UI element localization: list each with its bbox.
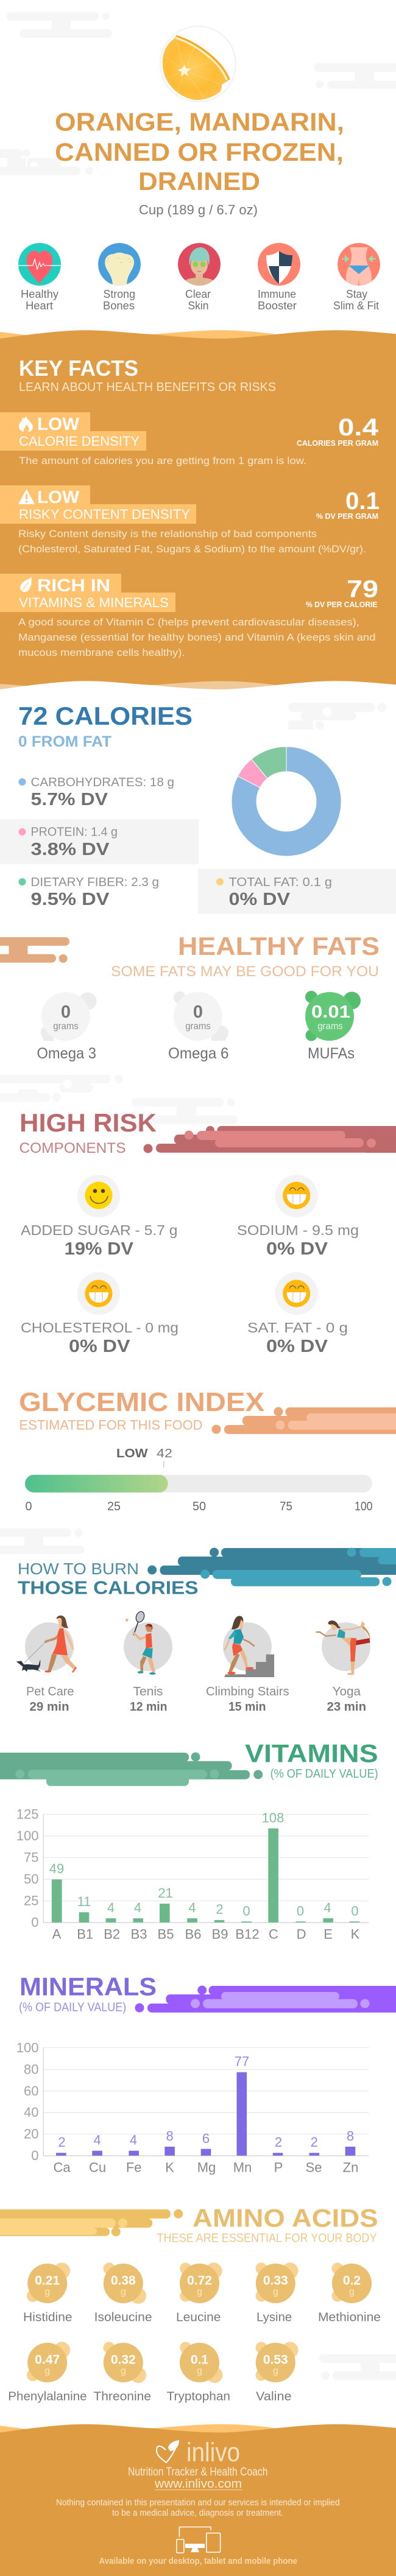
bar chart: minerals: Ca bbox=[54, 2160, 71, 2175]
activity: yoga: Yoga bbox=[333, 1685, 361, 1698]
icon: orange slice bbox=[160, 26, 236, 102]
subheading: ESTIMATED FOR THIS FOOD bbox=[19, 1418, 202, 1433]
benefit labels: Skin bbox=[188, 300, 208, 312]
item: added sugar bbox=[21, 1175, 178, 1259]
bar chart: vitamins: B2 bbox=[104, 1926, 120, 1941]
gauge label: 42 bbox=[157, 1446, 172, 1460]
serving size: Cup (189 g / 6.7 oz) bbox=[139, 202, 258, 217]
panel: minerals bbox=[16, 1972, 396, 2175]
decorative cloud bbox=[288, 703, 386, 730]
panel: key facts bbox=[0, 330, 396, 697]
activity: tennis bbox=[124, 1610, 172, 1714]
activity: yoga: 23 min bbox=[327, 1700, 366, 1714]
bar chart: vitamins: B12 bbox=[235, 1926, 260, 1941]
bar chart: vitamins: 75 bbox=[24, 1850, 39, 1865]
illustration: woman in yoga pose bbox=[316, 1621, 370, 1675]
metric name: RISKY CONTENT DENSITY bbox=[19, 507, 190, 522]
item: saturated fat: SAT. FAT - 0 g bbox=[247, 1320, 348, 1336]
bubble: lysine: g bbox=[273, 2287, 278, 2297]
bubble: histidine: Histidine bbox=[23, 2311, 72, 2324]
heading: calories: 72 CALORIES bbox=[18, 702, 193, 730]
wave: key facts bottom light bbox=[0, 681, 278, 694]
bubble: leucine: Leucine bbox=[176, 2311, 221, 2324]
activity: pet care: 29 min bbox=[29, 1700, 69, 1714]
bubble: phenylalanine: g bbox=[44, 2366, 50, 2376]
bubble: mufas: MUFAs bbox=[308, 1045, 355, 1062]
rating: LOW bbox=[37, 488, 80, 507]
benefit labels: Booster bbox=[258, 300, 297, 312]
bubble: histidine: 0.21 bbox=[35, 2274, 60, 2288]
gauge scale: 100 bbox=[355, 1500, 373, 1513]
bar chart: minerals: 4 bbox=[130, 2133, 137, 2148]
rating: LOW bbox=[37, 415, 80, 434]
fact: rich in vitamins and minerals bbox=[0, 574, 378, 658]
bar chart: minerals: K bbox=[165, 2160, 174, 2175]
description bbox=[18, 616, 375, 658]
row: protein: PROTEIN: 1.4 g bbox=[30, 826, 118, 839]
bubble: omega 3 bbox=[37, 992, 96, 1062]
decorative cloud bbox=[0, 1529, 85, 1554]
row: total fat: 0% DV bbox=[229, 890, 291, 909]
unit: CALORIES PER GRAM bbox=[297, 438, 378, 448]
gauge label: LOW bbox=[116, 1446, 148, 1460]
bar chart: vitamins: B9 bbox=[212, 1926, 228, 1941]
icon: immune booster bbox=[258, 243, 300, 286]
bubble: lysine: Lysine bbox=[256, 2311, 292, 2324]
bar chart: vitamins: B6 bbox=[185, 1926, 201, 1941]
decorative bars bbox=[0, 1753, 263, 1786]
gauge label bbox=[116, 1446, 172, 1468]
bubble: lysine: 0.33 bbox=[263, 2274, 288, 2288]
bubble: leucine: 0.72 bbox=[187, 2274, 212, 2288]
bar chart: vitamins: A bbox=[52, 1926, 62, 1941]
bubble: mufas: grams bbox=[317, 1021, 343, 1032]
decorative cloud: left of title bbox=[0, 149, 93, 175]
bubble: leucine: g bbox=[197, 2287, 202, 2297]
value: 0.4 bbox=[338, 414, 379, 441]
bubble: isoleucine: Isoleucine bbox=[94, 2311, 152, 2324]
icon: devices bbox=[177, 2527, 221, 2553]
heading: key facts: KEY FACTS bbox=[19, 356, 138, 381]
bar chart: minerals: 8 bbox=[166, 2128, 174, 2144]
bubble: mufas: 0.01 bbox=[311, 1002, 350, 1022]
decorative cloud bbox=[319, 2354, 396, 2380]
bubble: tryptophan: Tryptophan bbox=[167, 2390, 230, 2404]
bar chart: minerals: 8 bbox=[347, 2128, 354, 2144]
heading: healthy fats: HEALTHY FATS bbox=[178, 932, 380, 960]
illustration: woman climbing stairs bbox=[223, 1616, 274, 1677]
donut chart bbox=[232, 747, 341, 856]
bar chart: minerals: 2 bbox=[311, 2134, 318, 2150]
item: saturated fat: 0% DV bbox=[266, 1337, 328, 1356]
fact: calorie density bbox=[0, 412, 379, 466]
bar chart: vitamins: C bbox=[269, 1926, 278, 1941]
decorative bars bbox=[0, 2209, 183, 2236]
panel: high risk bbox=[19, 1108, 396, 1356]
fact: risky content density bbox=[0, 485, 380, 555]
icon: grin bbox=[283, 1280, 310, 1307]
disclaimer bbox=[56, 2497, 340, 2518]
benefit labels: Immune bbox=[258, 288, 296, 300]
icon: warning bbox=[18, 489, 35, 504]
bar chart: vitamins: 49 bbox=[49, 1861, 64, 1876]
subheading: COMPONENTS bbox=[19, 1140, 126, 1156]
bar chart: minerals: 20 bbox=[24, 2127, 39, 2142]
bubble: omega 6: grams bbox=[185, 1021, 211, 1032]
bubble: omega 6 bbox=[168, 991, 229, 1062]
bubble: isoleucine bbox=[94, 2263, 152, 2324]
bar chart: vitamins: 4 bbox=[107, 1900, 115, 1915]
icon: grin bbox=[283, 1181, 310, 1209]
bubble: omega 3: grams bbox=[53, 1021, 79, 1032]
gauge scale: 50 bbox=[193, 1500, 206, 1513]
item: sodium: SODIUM - 9.5 mg bbox=[237, 1222, 359, 1238]
decorative cloud: top right bbox=[314, 63, 396, 89]
disclaimer: Nothing contained in this presentation and our services is intended or implied bbox=[56, 2497, 340, 2508]
decorative bars bbox=[147, 1548, 396, 1586]
benefit labels: Heart bbox=[26, 300, 53, 312]
decorative bars bbox=[144, 1126, 396, 1153]
decorative cloud: top left bbox=[7, 12, 112, 38]
bar chart: minerals: 4 bbox=[93, 2133, 101, 2148]
row: carbohydrates bbox=[18, 776, 174, 809]
bar chart: minerals: 77 bbox=[235, 2053, 249, 2069]
decorative clouds: above high risk bbox=[0, 1075, 238, 1124]
activity: pet care bbox=[16, 1616, 77, 1714]
row: total fat: TOTAL FAT: 0.1 g bbox=[229, 876, 332, 889]
bar chart: vitamins: 0 bbox=[351, 1904, 359, 1919]
row: carbohydrates: CARBOHYDRATES: 18 g bbox=[30, 776, 174, 789]
heading: those calories: THOSE CALORIES bbox=[18, 1577, 199, 1599]
bar chart: minerals bbox=[16, 2040, 369, 2175]
panel: vitamins bbox=[0, 1739, 378, 1941]
activity: pet care: Pet Care bbox=[26, 1685, 74, 1698]
value: 79 bbox=[347, 576, 378, 603]
icon: clear skin bbox=[178, 243, 221, 287]
decorative bars bbox=[212, 1407, 396, 1434]
panel background bbox=[0, 330, 396, 694]
benefit labels bbox=[21, 288, 379, 312]
bar chart: minerals: 2 bbox=[58, 2134, 66, 2150]
bubble: threonine: 0.32 bbox=[111, 2353, 136, 2367]
icon: strong bones bbox=[98, 243, 141, 286]
activity: tennis: 12 min bbox=[130, 1700, 167, 1714]
footer background bbox=[0, 2424, 396, 2576]
description: A good source of Vitamin C (helps prevent cardiovascular diseases), bbox=[18, 616, 359, 628]
description bbox=[18, 528, 366, 555]
bubble: methionine: g bbox=[349, 2287, 355, 2297]
activity: climbing stairs: Climbing Stairs bbox=[206, 1685, 289, 1698]
bar chart: minerals: Zn bbox=[343, 2160, 358, 2175]
logo: wordmark: inlivo bbox=[186, 2438, 240, 2468]
bubble: omega 6: Omega 6 bbox=[168, 1045, 229, 1062]
heading: glycemic index: GLYCEMIC INDEX bbox=[19, 1387, 264, 1417]
bubble: threonine: Threonine bbox=[93, 2390, 151, 2404]
bubble: threonine bbox=[93, 2342, 151, 2404]
bar chart: vitamins: 0 bbox=[242, 1904, 250, 1919]
item: saturated fat bbox=[247, 1272, 348, 1356]
benefit icons row bbox=[18, 243, 380, 287]
icon: healthy heart bbox=[18, 243, 61, 286]
bar chart: minerals: 80 bbox=[24, 2061, 39, 2077]
bar chart: minerals: Mg bbox=[197, 2160, 216, 2175]
subheading: 0 FROM FAT bbox=[18, 733, 111, 750]
bar chart: vitamins: 4 bbox=[134, 1900, 141, 1915]
bar chart: minerals: 2 bbox=[275, 2134, 282, 2150]
activity: yoga bbox=[316, 1621, 370, 1714]
bar chart: vitamins: 25 bbox=[24, 1893, 39, 1909]
icon: smiley bbox=[85, 1181, 112, 1209]
benefit labels: Bones bbox=[103, 300, 135, 312]
item: sodium: 0% DV bbox=[266, 1239, 328, 1259]
subheading: LEARN ABOUT HEALTH BENEFITS OR RISKS bbox=[19, 381, 276, 394]
bubble: omega 3: 0 bbox=[61, 1002, 71, 1022]
availability note: Available on your desktop, tablet and mobile phone bbox=[99, 2556, 297, 2566]
subheading: SOME FATS MAY BE GOOD FOR YOU bbox=[111, 963, 379, 980]
icon: leaf bbox=[20, 577, 32, 592]
bar chart: vitamins bbox=[16, 1807, 369, 1941]
bar chart: minerals: Mn bbox=[233, 2160, 252, 2175]
bubble: histidine bbox=[23, 2263, 72, 2324]
title: CANNED OR FROZEN, bbox=[55, 138, 344, 166]
wave: footer light bbox=[0, 2424, 278, 2441]
bar chart: minerals: Cu bbox=[89, 2160, 106, 2175]
icon: flame bbox=[19, 415, 33, 432]
item: cholesterol bbox=[21, 1272, 179, 1356]
disclaimer: to be a medical advice, diagnosis or treatment. bbox=[112, 2508, 283, 2518]
bubble: valine: Valine bbox=[256, 2390, 291, 2404]
rating: RICH IN bbox=[37, 576, 110, 596]
gauge scale bbox=[26, 1500, 373, 1513]
bubble: histidine: g bbox=[44, 2287, 50, 2297]
item: added sugar: 19% DV bbox=[65, 1239, 134, 1259]
bubble: tryptophan bbox=[167, 2342, 230, 2404]
unit: % DV PER CALORIE bbox=[306, 600, 378, 609]
row: carbohydrates: 5.7% DV bbox=[30, 790, 108, 809]
bubble: lysine bbox=[256, 2263, 299, 2324]
bar chart: vitamins: B1 bbox=[77, 1926, 93, 1941]
wave: key facts top light bbox=[0, 330, 278, 347]
illustration: tennis player bbox=[124, 1610, 172, 1675]
bar chart: minerals: Fe bbox=[126, 2160, 142, 2175]
benefit labels: Healthy bbox=[21, 288, 58, 300]
heading: how to burn: HOW TO BURN bbox=[18, 1560, 139, 1578]
row: dietary fiber bbox=[18, 876, 159, 909]
bar chart: minerals: P bbox=[274, 2160, 283, 2175]
subheading: (% OF DAILY VALUE) bbox=[19, 2001, 126, 2015]
icon: grin bbox=[85, 1280, 112, 1307]
panel: healthy fats bbox=[0, 932, 380, 1062]
row: protein bbox=[0, 819, 199, 864]
bubble: phenylalanine: Phenylalanine bbox=[8, 2390, 87, 2404]
bubble: valine bbox=[256, 2342, 299, 2404]
panel: footer bbox=[0, 2424, 396, 2576]
row: total fat bbox=[198, 869, 396, 914]
bar chart: vitamins: B5 bbox=[158, 1926, 174, 1941]
bar chart: minerals: Se bbox=[306, 2160, 322, 2175]
activity: climbing stairs bbox=[206, 1616, 289, 1714]
gauge bar bbox=[25, 1475, 372, 1493]
title bbox=[55, 108, 344, 195]
illustration: woman walking dog bbox=[16, 1616, 77, 1673]
panel: glycemic index bbox=[19, 1387, 396, 1513]
bubble: methionine: 0.2 bbox=[343, 2274, 361, 2288]
bar chart: vitamins: 0 bbox=[297, 1904, 304, 1919]
description: (Cholesterol, Saturated Fat, Sugars & Sodium) to the amount (%DV/gr). bbox=[18, 543, 366, 555]
bar chart: minerals: 100 bbox=[16, 2040, 39, 2055]
row: dietary fiber: DIETARY FIBER: 2.3 g bbox=[30, 876, 159, 889]
bar chart: vitamins: 50 bbox=[24, 1871, 39, 1887]
bar chart: minerals: 40 bbox=[24, 2105, 39, 2120]
heading: minerals: MINERALS bbox=[19, 1972, 157, 2001]
bar chart: vitamins: 2 bbox=[216, 1901, 224, 1916]
bar chart: vitamins: 0 bbox=[31, 1915, 39, 1930]
bubble: valine: 0.53 bbox=[263, 2353, 288, 2367]
gauge scale: 25 bbox=[107, 1500, 121, 1513]
activity: climbing stairs: 15 min bbox=[228, 1700, 266, 1714]
website: www.inlivo.com bbox=[154, 2477, 242, 2491]
subheading: (% OF DAILY VALUE) bbox=[270, 1767, 378, 1781]
bubble: tryptophan: 0.1 bbox=[191, 2353, 208, 2367]
bubble: methionine: Methionine bbox=[318, 2311, 381, 2324]
bubble: leucine bbox=[176, 2263, 222, 2324]
title: ORANGE, MANDARIN, bbox=[55, 108, 344, 136]
row: dietary fiber: 9.5% DV bbox=[30, 890, 110, 909]
bar chart: vitamins: 108 bbox=[262, 1810, 284, 1825]
bar chart: vitamins: 4 bbox=[324, 1900, 331, 1915]
item: cholesterol: CHOLESTEROL - 0 mg bbox=[21, 1320, 179, 1336]
bar chart: vitamins: 125 bbox=[16, 1807, 39, 1822]
bubble: omega 6: 0 bbox=[193, 1002, 203, 1022]
heading: vitamins: VITAMINS bbox=[245, 1739, 378, 1767]
bubble: valine: g bbox=[273, 2366, 278, 2376]
bubble: tryptophan: g bbox=[197, 2366, 202, 2376]
description: The amount of calories you are getting from 1 gram is low. bbox=[19, 455, 306, 466]
bar chart: minerals: 60 bbox=[24, 2083, 39, 2099]
bar chart: vitamins: K bbox=[351, 1926, 360, 1941]
panel: how to burn bbox=[0, 1529, 396, 1714]
bar chart: vitamins: 100 bbox=[16, 1828, 39, 1843]
metric name: VITAMINS & MINERALS bbox=[19, 595, 169, 610]
decorative bars bbox=[0, 937, 69, 963]
item: cholesterol: 0% DV bbox=[69, 1337, 130, 1356]
bubble: phenylalanine bbox=[8, 2342, 87, 2404]
description: Risky Content density is the relationship of bad components bbox=[18, 528, 317, 540]
bubble: isoleucine: g bbox=[121, 2287, 126, 2297]
bar chart: vitamins: B3 bbox=[131, 1926, 147, 1941]
bar chart: vitamins: 11 bbox=[77, 1894, 91, 1909]
unit: % DV PER GRAM bbox=[316, 512, 378, 521]
bar chart: minerals: 6 bbox=[202, 2131, 210, 2146]
panel: amino acids bbox=[0, 2204, 396, 2404]
row: protein: 3.8% DV bbox=[30, 840, 110, 859]
bubble: omega 3: Omega 3 bbox=[37, 1045, 96, 1062]
bubble: phenylalanine: 0.47 bbox=[35, 2353, 60, 2367]
logo: heart and leaf bbox=[157, 2441, 179, 2463]
heading: high risk: HIGH RISK bbox=[19, 1108, 157, 1137]
heading: amino acids: AMINO ACIDS bbox=[193, 2204, 378, 2233]
metric name: CALORIE DENSITY bbox=[19, 434, 140, 449]
panel: calories bbox=[0, 702, 396, 914]
bubble: methionine bbox=[318, 2263, 381, 2324]
bubble: threonine: g bbox=[121, 2366, 126, 2376]
benefit labels: Stay bbox=[346, 288, 367, 300]
gauge scale: 0 bbox=[26, 1500, 32, 1513]
icon: stay slim and fit bbox=[338, 243, 380, 286]
value: 0.1 bbox=[345, 488, 380, 515]
bar chart: vitamins: E bbox=[324, 1926, 333, 1941]
subheading: THESE ARE ESSENTIAL FOR YOUR BODY bbox=[157, 2232, 377, 2245]
item: added sugar: ADDED SUGAR - 5.7 g bbox=[21, 1222, 178, 1238]
wave: key facts bottom white bbox=[0, 681, 396, 697]
decorative bars bbox=[135, 1985, 396, 2013]
activity: tennis: Tenis bbox=[133, 1685, 163, 1698]
gauge scale: 75 bbox=[280, 1500, 292, 1513]
item: sodium bbox=[237, 1175, 359, 1259]
bubble: isoleucine: 0.38 bbox=[111, 2274, 136, 2288]
bubble: mufas bbox=[305, 991, 361, 1062]
bar chart: vitamins: D bbox=[297, 1926, 306, 1941]
title: DRAINED bbox=[138, 167, 260, 195]
bar chart: vitamins: 4 bbox=[188, 1900, 196, 1915]
benefit labels: Strong bbox=[104, 288, 135, 300]
description: Manganese (essential for healthy bones) and Vitamin A (keeps skin and bbox=[18, 632, 375, 643]
benefit labels: Slim & Fit bbox=[333, 300, 379, 312]
bar chart: minerals: 0 bbox=[31, 2148, 39, 2163]
description: mucous membrane cells healthy). bbox=[18, 647, 185, 658]
benefit labels: Clear bbox=[185, 288, 211, 300]
bar chart: vitamins: 21 bbox=[158, 1885, 173, 1901]
tagline: Nutrition Tracker & Health Coach bbox=[128, 2466, 268, 2479]
